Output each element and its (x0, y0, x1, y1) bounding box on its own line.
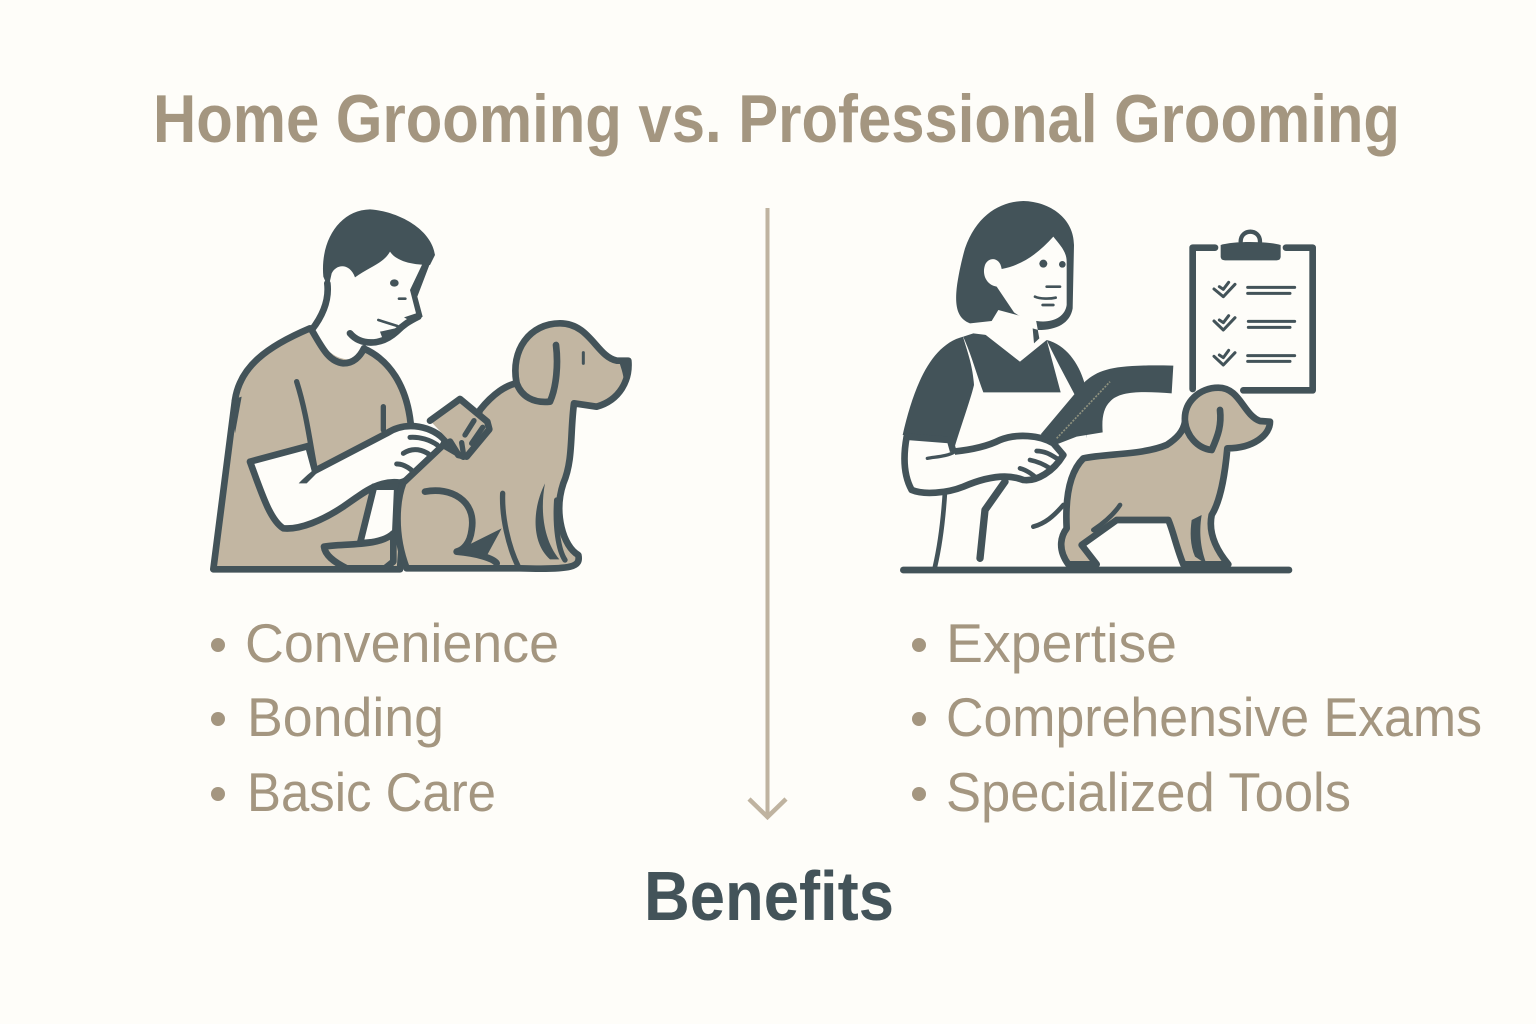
list: professional grooming benefits: Specialized Tools (946, 761, 1351, 823)
man nose (404, 263, 430, 323)
groomer head and hair (956, 201, 1074, 362)
hair dryer (1041, 365, 1173, 444)
dog seated (397, 323, 631, 569)
groomer neck (985, 310, 1037, 362)
man arm holding brush (250, 382, 445, 529)
vertical divider arrow (749, 208, 786, 817)
footer heading: benefits: Benefits (644, 857, 894, 935)
checklist (1214, 282, 1295, 365)
list: professional grooming benefits: Expertise (946, 612, 1177, 674)
icon: professional groomer with dog, dryer and clipboard (903, 201, 1313, 570)
groomer torso and apron (903, 333, 1090, 567)
list: home grooming benefits: Bonding (247, 686, 444, 748)
list: professional grooming benefits: Comprehensive Exams (946, 686, 1482, 748)
list: home grooming benefits: Basic Care (247, 761, 496, 823)
dog ear and face (517, 345, 557, 402)
list: home grooming benefits: Convenience (245, 612, 559, 674)
dog ear (1185, 410, 1220, 450)
dog haunch (425, 491, 497, 563)
man torso in tan shirt (213, 328, 411, 569)
dog standing (1033, 388, 1270, 564)
dog legs (503, 493, 518, 567)
grooming table line (903, 560, 1289, 580)
man lap and leg (324, 487, 397, 568)
groomer arm and hand (905, 436, 1063, 493)
dog leg details (1191, 515, 1207, 564)
brush (430, 399, 489, 457)
man head and neck (312, 209, 435, 363)
clipboard (1193, 232, 1313, 390)
list: home grooming benefits (211, 612, 559, 823)
title: Home Grooming vs. Professional Grooming (153, 81, 1400, 157)
icon: man grooming a seated dog at home (213, 209, 631, 569)
list: professional grooming benefits (912, 612, 1482, 823)
